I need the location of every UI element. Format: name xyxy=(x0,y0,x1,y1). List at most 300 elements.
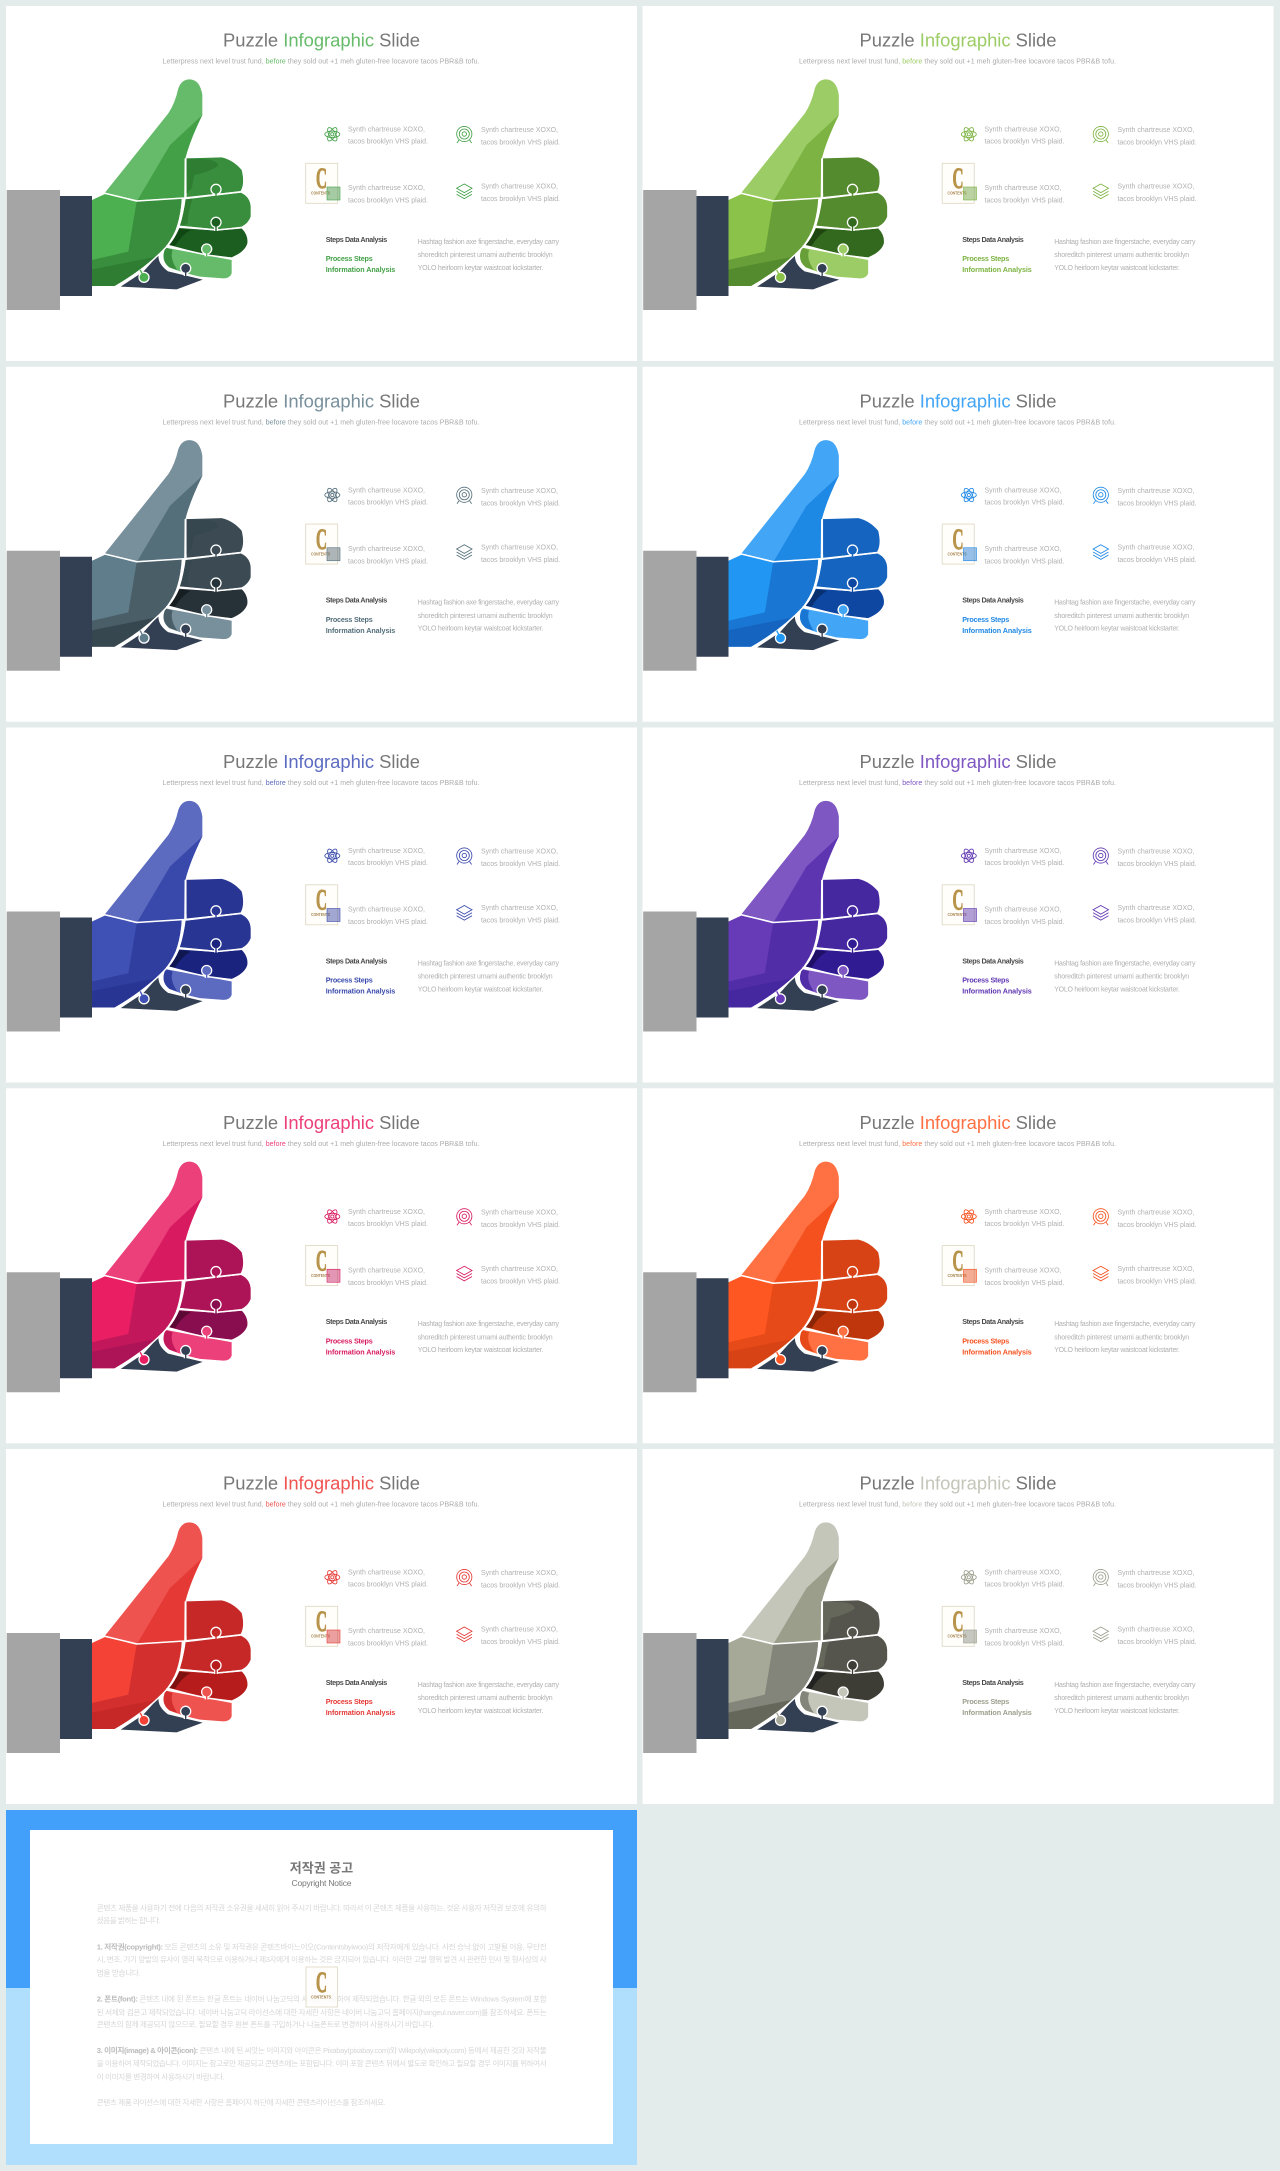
feature text 2: tacos brooklyn VHS plaid. xyxy=(1118,1222,1197,1229)
panel: copyright notice xyxy=(6,1810,637,2165)
icon: target xyxy=(457,126,472,143)
steps paragraph: YOLO heirloom keytar waistcoat kickstarter. xyxy=(1054,626,1180,633)
subtitle: Letterpress next level trust fund, before they sold out +1 meh gluten-free locavore tacos PBR&B tofu. xyxy=(162,780,480,787)
icon: target xyxy=(457,487,472,504)
steps headings: Information Analysis xyxy=(962,1347,1032,1356)
cuff xyxy=(60,196,92,296)
cuff xyxy=(60,1639,92,1739)
watermark badge: C xyxy=(952,884,964,916)
light blue frame bottom xyxy=(6,1988,637,2165)
feature text 3 xyxy=(984,1628,1065,1648)
feature text 3 xyxy=(348,1628,428,1648)
steps paragraph: YOLO heirloom keytar waistcoat kickstarter. xyxy=(418,626,543,633)
steps headings xyxy=(326,1317,395,1356)
watermark badge: C xyxy=(316,1605,327,1638)
steps headings xyxy=(326,596,395,635)
notice clause 2: 콘텐츠의 함께 제공되지 않으므로, 필요할 경우 원본 폰트를 구입하거나 나눔폰트로 변경하여 사용하시기 바랍니다. xyxy=(97,2019,434,2029)
panel: slate slide xyxy=(6,367,637,722)
panel background xyxy=(642,6,1274,361)
feature text 2: tacos brooklyn VHS plaid. xyxy=(481,500,560,507)
icon: target xyxy=(1093,1209,1108,1225)
icon: target xyxy=(1093,848,1108,864)
feature text 2: Synth chartreuse XOXO, xyxy=(481,848,558,856)
watermark badge: C xyxy=(316,162,327,195)
feature text 1: Synth chartreuse XOXO, xyxy=(984,487,1062,494)
icon: layers xyxy=(1093,906,1108,920)
watermark badge xyxy=(306,884,340,925)
watermark badge: C xyxy=(952,1605,964,1638)
feature text 4: tacos brooklyn VHS plaid. xyxy=(481,1639,560,1646)
steps paragraph: Hashtag fashion axe fingerstache, everyday carry xyxy=(1054,600,1196,607)
steps headings: Steps Data Analysis xyxy=(962,956,1024,965)
feature text 4: Synth chartreuse XOXO, xyxy=(481,544,558,551)
title: Puzzle Infographic Slide xyxy=(223,1112,420,1133)
steps headings: Information Analysis xyxy=(326,987,395,996)
feature text 3: Synth chartreuse XOXO, xyxy=(348,546,425,553)
panel background xyxy=(6,1088,637,1443)
feature text 4 xyxy=(481,1626,560,1646)
watermark badge xyxy=(306,1244,340,1286)
watermark badge: C xyxy=(316,523,327,556)
subtitle: Letterpress next level trust fund, before they sold out +1 meh gluten-free locavore tacos PBR&B tofu. xyxy=(799,1141,1116,1148)
notice clause 2: 된 서체와 검은고 제작되었습니다. 네이버 나눔고딕 라이선스에 대한 자세한 사항은 네이버 나눔고딕 홈페이지(hangeul.naver.com)를 참조하세요. 폰트는 xyxy=(97,2007,547,2017)
title: Puzzle Infographic Slide xyxy=(223,390,420,411)
panel: green slide xyxy=(6,6,637,361)
icon: atom xyxy=(961,487,976,503)
feature text 1: Synth chartreuse XOXO, xyxy=(348,487,425,494)
panel background xyxy=(6,1449,637,1804)
notice title: 저작권 공고 xyxy=(290,1860,353,1876)
feature text 1: tacos brooklyn VHS plaid. xyxy=(348,860,428,867)
notice footer line: 콘텐츠 제품 라이선스에 대한 자세한 사항은 홈페이지 하단에 자세한 콘텐츠라이선스를 참조하세요. xyxy=(97,2097,386,2107)
feature text 4: Synth chartreuse XOXO, xyxy=(1118,905,1195,912)
feature text 2 xyxy=(481,848,560,868)
feature text 4 xyxy=(481,905,560,924)
feature text 4 xyxy=(1118,1626,1197,1646)
steps headings: Steps Data Analysis xyxy=(962,1317,1024,1326)
steps headings: Information Analysis xyxy=(326,626,395,635)
feature text 4: tacos brooklyn VHS plaid. xyxy=(1118,1278,1197,1285)
feature text 1 xyxy=(348,1209,428,1228)
steps paragraph: shoreditch pinterest umami authentic brooklyn xyxy=(1054,974,1189,981)
notice clause 1: 법을 받습니다. xyxy=(97,1968,141,1978)
icon: layers xyxy=(457,1627,472,1642)
icon: atom xyxy=(961,1569,976,1585)
watermark badge: CONTENTS xyxy=(311,1273,330,1278)
feature text 4 xyxy=(481,184,560,203)
steps paragraph: Hashtag fashion axe fingerstache, everyday carry xyxy=(418,600,560,607)
subtitle: Letterpress next level trust fund, before they sold out +1 meh gluten-free locavore tacos PBR&B tofu. xyxy=(162,58,480,66)
steps headings: Process Steps xyxy=(326,976,373,985)
feature text 1 xyxy=(984,1570,1065,1588)
feature text 1: Synth chartreuse XOXO, xyxy=(984,848,1062,855)
title: Puzzle Infographic Slide xyxy=(860,751,1056,772)
feature text 1: Synth chartreuse XOXO, xyxy=(348,848,425,855)
feature text 2 xyxy=(1118,127,1197,146)
feature text 2: Synth chartreuse XOXO, xyxy=(1118,488,1195,495)
steps headings: Steps Data Analysis xyxy=(326,1317,387,1326)
notice clause 1: 1. 저작권(copyright): 모든 콘텐츠의 소유 및 저작권은 콘텐츠바이느이오(Contentsbyiwoo)의 저작자에게 있습니다. 사전 승낙 없이 고발될 이용, 무단전 xyxy=(97,1942,547,1952)
notice clause 3 xyxy=(97,2045,547,2082)
notice clause 1: 시, 변조, 기기 양발의 유사이 영리 목적으로 이용하거나 제3자에게 이용하는 것은 금지되어 있습니다. 이러한 고발 행위 발견 시 관련한 민사 및 형사상의 사 xyxy=(97,1954,547,1964)
feature text 1: tacos brooklyn VHS plaid. xyxy=(984,860,1065,867)
notice subtitle: Copyright Notice xyxy=(292,1878,352,1888)
feature text 3: tacos brooklyn VHS plaid. xyxy=(984,198,1065,204)
feature text 4 xyxy=(481,1266,560,1285)
sleeve xyxy=(643,912,696,1032)
feature text 2: Synth chartreuse XOXO, xyxy=(481,1209,558,1216)
cuff xyxy=(696,1639,728,1739)
thumbs-up puzzle hand xyxy=(92,440,251,650)
feature text 4: tacos brooklyn VHS plaid. xyxy=(1118,557,1197,564)
panel: purple slide xyxy=(642,728,1274,1082)
watermark badge: CONTENTS xyxy=(311,1634,330,1638)
steps paragraph: Hashtag fashion axe fingerstache, everyday carry xyxy=(1054,1682,1196,1689)
steps headings xyxy=(326,956,395,996)
feature text 4: Synth chartreuse XOXO, xyxy=(1118,184,1195,190)
steps paragraph: Hashtag fashion axe fingerstache, everyday carry xyxy=(418,1321,560,1328)
icon: layers xyxy=(1093,184,1108,199)
panel background xyxy=(6,6,637,361)
steps paragraph: shoreditch pinterest umami authentic brooklyn xyxy=(418,613,553,620)
thumbs-up puzzle hand xyxy=(92,79,251,289)
feature text 4 xyxy=(1118,905,1197,924)
blue frame top xyxy=(6,1810,637,1988)
steps paragraph xyxy=(1054,600,1196,633)
title: Puzzle Infographic Slide xyxy=(860,1472,1056,1494)
feature text 3: tacos brooklyn VHS plaid. xyxy=(984,1640,1065,1648)
steps headings xyxy=(326,1678,395,1717)
feature text 4 xyxy=(1118,544,1197,564)
notice clause 3: 이 이미지를 변경하여 사용하시기 바랍니다. xyxy=(97,2072,225,2082)
steps headings xyxy=(962,235,1032,274)
subtitle: Letterpress next level trust fund, before they sold out +1 meh gluten-free locavore tacos PBR&B tofu. xyxy=(799,780,1116,787)
steps headings xyxy=(326,235,395,274)
icon: atom xyxy=(325,487,340,503)
feature text 2: Synth chartreuse XOXO, xyxy=(481,127,558,134)
feature text 3: tacos brooklyn VHS plaid. xyxy=(984,919,1065,926)
steps paragraph: YOLO heirloom keytar waistcoat kickstarter. xyxy=(1054,1708,1180,1715)
cuff xyxy=(60,557,92,657)
feature text 1: Synth chartreuse XOXO, xyxy=(348,126,425,134)
steps headings: Steps Data Analysis xyxy=(326,1678,387,1687)
feature text 1 xyxy=(984,1209,1065,1228)
steps paragraph xyxy=(1054,239,1196,272)
steps headings: Steps Data Analysis xyxy=(326,235,387,244)
steps headings: Information Analysis xyxy=(326,265,395,274)
steps headings: Information Analysis xyxy=(962,626,1032,635)
icon: layers xyxy=(457,184,472,199)
title: Puzzle Infographic Slide xyxy=(223,1472,420,1494)
steps paragraph: Hashtag fashion axe fingerstache, everyday carry xyxy=(1054,1321,1196,1328)
steps paragraph: YOLO heirloom keytar waistcoat kickstarter. xyxy=(1054,986,1180,993)
sleeve xyxy=(643,1272,696,1392)
feature text 1 xyxy=(984,848,1065,867)
icon: atom xyxy=(961,126,976,142)
steps headings: Information Analysis xyxy=(962,987,1032,996)
feature text 3: tacos brooklyn VHS plaid. xyxy=(348,558,428,565)
feature text 1: Synth chartreuse XOXO, xyxy=(348,1570,425,1576)
feature text 3: tacos brooklyn VHS plaid. xyxy=(348,198,428,204)
feature text 2: tacos brooklyn VHS plaid. xyxy=(1118,861,1197,868)
steps paragraph: shoreditch pinterest umami authentic brooklyn xyxy=(418,252,553,259)
feature text 4: Synth chartreuse XOXO, xyxy=(1118,1626,1195,1634)
steps headings: Process Steps xyxy=(962,1336,1009,1345)
feature text 4: tacos brooklyn VHS plaid. xyxy=(1118,918,1197,924)
steps paragraph: YOLO heirloom keytar waistcoat kickstarter. xyxy=(418,1708,543,1715)
steps paragraph: shoreditch pinterest umami authentic brooklyn xyxy=(1054,613,1189,620)
icon: atom xyxy=(325,126,340,142)
subtitle: Letterpress next level trust fund, before they sold out +1 meh gluten-free locavore tacos PBR&B tofu. xyxy=(799,58,1116,66)
steps paragraph: YOLO heirloom keytar waistcoat kickstarter. xyxy=(1054,265,1180,272)
title: Puzzle Infographic Slide xyxy=(860,390,1056,411)
icon: layers xyxy=(457,545,472,559)
steps paragraph: YOLO heirloom keytar waistcoat kickstarter. xyxy=(1054,1347,1180,1354)
steps headings: Information Analysis xyxy=(326,1347,395,1356)
feature text 3: tacos brooklyn VHS plaid. xyxy=(984,1280,1065,1287)
steps headings: Steps Data Analysis xyxy=(962,596,1024,605)
watermark badge: C xyxy=(316,1966,327,1999)
notice clause 3: 3. 이미지(image) & 아이콘(icon): 콘텐츠 내에 된 씨앗는 이미지와 아이콘은 Pixabay(pixabay.com)와 Wikipoly(wikipoly.com) 등에서 제공한 것과 저작물 xyxy=(97,2045,547,2055)
feature text 2: tacos brooklyn VHS plaid. xyxy=(481,140,560,146)
feature text 3: Synth chartreuse XOXO, xyxy=(348,906,425,914)
feature text 4: Synth chartreuse XOXO, xyxy=(481,1626,558,1634)
panel: orange slide xyxy=(642,1088,1274,1443)
steps paragraph: Hashtag fashion axe fingerstache, everyday carry xyxy=(418,239,560,246)
icon: atom xyxy=(325,848,340,864)
title: Puzzle Infographic Slide xyxy=(223,30,420,50)
feature text 2 xyxy=(1118,1570,1197,1590)
feature text 4: tacos brooklyn VHS plaid. xyxy=(1118,196,1197,203)
white notice card xyxy=(30,1830,613,2144)
watermark badge: C xyxy=(952,523,964,556)
feature text 4 xyxy=(481,544,560,564)
feature text 1: tacos brooklyn VHS plaid. xyxy=(348,1221,428,1228)
icon: layers xyxy=(457,1266,472,1281)
feature text 2 xyxy=(481,1209,560,1229)
steps paragraph: shoreditch pinterest umami authentic brooklyn xyxy=(1054,1695,1189,1702)
steps headings: Process Steps xyxy=(326,1336,373,1345)
cuff xyxy=(696,918,728,1018)
notice clause 2: 2. 폰트(font): 콘텐츠 내에 된 폰트는 한글 폰트는 네이버 나눔고딕의 서체를 사용하여 제작되었습니다. 한글 외의 모든 폰트는 Windows System에 포함 xyxy=(97,1994,547,2004)
panel: indigo slide xyxy=(6,728,637,1082)
steps paragraph xyxy=(1054,960,1196,993)
feature text 3: Synth chartreuse XOXO, xyxy=(984,1267,1062,1274)
feature text 3: Synth chartreuse XOXO, xyxy=(984,1628,1062,1635)
feature text 3 xyxy=(984,906,1065,926)
steps headings xyxy=(962,1678,1032,1717)
feature text 3 xyxy=(348,906,428,926)
thumbs-up puzzle hand xyxy=(728,1522,887,1732)
notice intro: 콘텐츠 제품을 사용하기 전에 다음의 저작권 소유권을 세세히 읽어 주시기 바랍니다. 따라서 이 콘텐츠 제품을 사용하는, 것은 사용자 저작권 보호에 유의하 xyxy=(97,1902,547,1912)
feature text 3 xyxy=(984,546,1065,565)
steps paragraph xyxy=(418,1682,560,1715)
steps headings: Process Steps xyxy=(326,1697,373,1706)
notice intro: 셨음을 밝히는 합니다. xyxy=(97,1915,161,1925)
thumbs-up puzzle hand xyxy=(728,79,887,289)
feature text 1 xyxy=(348,1570,428,1588)
watermark badge: CONTENTS xyxy=(948,1273,966,1278)
steps headings: Steps Data Analysis xyxy=(962,1678,1024,1687)
feature text 3: Synth chartreuse XOXO, xyxy=(348,1267,425,1274)
feature text 2: Synth chartreuse XOXO, xyxy=(1118,127,1195,134)
feature text 2: Synth chartreuse XOXO, xyxy=(1118,1209,1195,1216)
steps headings: Process Steps xyxy=(326,615,373,624)
watermark badge: CONTENTS xyxy=(311,1994,331,2000)
thumbs-up puzzle hand xyxy=(728,440,887,650)
icon: atom xyxy=(961,1208,976,1225)
feature text 3 xyxy=(984,185,1065,204)
notice intro xyxy=(97,1902,547,1925)
panel background xyxy=(642,728,1274,1082)
feature text 2: Synth chartreuse XOXO, xyxy=(1118,848,1195,856)
panel background xyxy=(6,367,637,722)
watermark badge xyxy=(942,884,976,925)
feature text 3 xyxy=(984,1267,1065,1287)
icon: atom xyxy=(961,848,976,864)
notice clause 1 xyxy=(97,1942,547,1978)
icon: target xyxy=(457,848,472,864)
panel background xyxy=(642,1088,1274,1443)
feature text 3: Synth chartreuse XOXO, xyxy=(348,185,425,192)
feature text 1 xyxy=(348,487,428,506)
watermark badge: C xyxy=(952,1244,964,1277)
feature text 1 xyxy=(348,848,428,867)
panel: blue slide xyxy=(642,367,1274,722)
feature text 4: tacos brooklyn VHS plaid. xyxy=(481,918,560,924)
feature text 2 xyxy=(481,127,560,146)
steps headings: Process Steps xyxy=(962,615,1009,624)
icon: layers xyxy=(1093,545,1108,559)
feature text 2: Synth chartreuse XOXO, xyxy=(1118,1570,1195,1577)
steps headings xyxy=(962,1317,1032,1356)
steps paragraph xyxy=(418,600,560,633)
icon: target xyxy=(1093,126,1108,143)
watermark badge: CONTENTS xyxy=(948,912,966,917)
feature text 4 xyxy=(1118,1266,1197,1285)
feature text 1: tacos brooklyn VHS plaid. xyxy=(984,1221,1065,1228)
thumbs-up puzzle hand xyxy=(728,1162,887,1372)
feature text 2 xyxy=(1118,488,1197,507)
watermark badge: CONTENTS xyxy=(948,190,966,196)
feature text 1: tacos brooklyn VHS plaid. xyxy=(984,499,1065,506)
feature text 3 xyxy=(348,1267,428,1287)
feature text 2: tacos brooklyn VHS plaid. xyxy=(1118,1582,1197,1590)
steps paragraph: shoreditch pinterest umami authentic brooklyn xyxy=(418,974,553,981)
steps headings: Process Steps xyxy=(962,1697,1009,1706)
feature text 2 xyxy=(1118,848,1197,868)
feature text 4: Synth chartreuse XOXO, xyxy=(481,184,558,190)
steps paragraph: shoreditch pinterest umami authentic brooklyn xyxy=(418,1334,553,1341)
steps paragraph xyxy=(418,1321,560,1354)
feature text 3 xyxy=(348,546,428,565)
icon: layers xyxy=(457,906,472,920)
watermark badge: C xyxy=(952,162,964,195)
notice clause 2 xyxy=(97,1994,547,2029)
steps headings xyxy=(962,596,1032,635)
feature text 4: Synth chartreuse XOXO, xyxy=(481,905,558,912)
steps paragraph xyxy=(1054,1321,1196,1354)
thumbs-up puzzle hand xyxy=(92,801,251,1011)
feature text 2: tacos brooklyn VHS plaid. xyxy=(481,1222,560,1229)
steps paragraph: YOLO heirloom keytar waistcoat kickstarter. xyxy=(418,986,543,993)
panel: pink slide xyxy=(6,1088,637,1443)
icon: atom xyxy=(325,1208,340,1225)
feature text 3: tacos brooklyn VHS plaid. xyxy=(348,919,428,926)
subtitle: Letterpress next level trust fund, before they sold out +1 meh gluten-free locavore tacos PBR&B tofu. xyxy=(162,1141,480,1148)
cuff xyxy=(696,1278,728,1378)
icon: layers xyxy=(1093,1266,1108,1281)
subtitle: Letterpress next level trust fund, before they sold out +1 meh gluten-free locavore tacos PBR&B tofu. xyxy=(162,1502,480,1508)
panel background xyxy=(642,1449,1274,1804)
watermark badge xyxy=(942,162,976,203)
feature text 1: Synth chartreuse XOXO, xyxy=(984,126,1062,134)
sleeve xyxy=(7,1272,60,1392)
steps headings xyxy=(962,956,1032,996)
watermark badge: C xyxy=(316,884,327,916)
feature text 4: Synth chartreuse XOXO, xyxy=(1118,544,1195,551)
watermark badge: CONTENTS xyxy=(948,551,966,556)
steps paragraph xyxy=(1054,1682,1196,1715)
steps paragraph: Hashtag fashion axe fingerstache, everyday carry xyxy=(418,1682,560,1689)
steps headings: Process Steps xyxy=(962,254,1009,263)
cuff xyxy=(60,918,92,1018)
feature text 2: tacos brooklyn VHS plaid. xyxy=(1118,500,1197,507)
title: Puzzle Infographic Slide xyxy=(860,30,1056,50)
feature text 4 xyxy=(1118,184,1197,203)
feature text 1 xyxy=(984,126,1065,146)
steps paragraph: Hashtag fashion axe fingerstache, everyday carry xyxy=(1054,239,1196,246)
watermark badge: CONTENTS xyxy=(948,1634,966,1638)
watermark badge: CONTENTS xyxy=(311,912,330,917)
watermark badge xyxy=(306,1605,340,1646)
steps paragraph xyxy=(418,960,560,993)
steps paragraph: shoreditch pinterest umami authentic brooklyn xyxy=(418,1695,553,1702)
steps paragraph: Hashtag fashion axe fingerstache, everyday carry xyxy=(418,960,560,967)
steps paragraph: Hashtag fashion axe fingerstache, everyday carry xyxy=(1054,960,1196,967)
watermark badge xyxy=(306,1966,338,2007)
watermark badge: CONTENTS xyxy=(311,551,330,556)
steps paragraph xyxy=(418,239,560,272)
panel background xyxy=(642,367,1274,722)
icon: layers xyxy=(1093,1627,1108,1642)
watermark badge xyxy=(942,1244,976,1286)
watermark badge: C xyxy=(316,1244,327,1277)
sleeve xyxy=(7,912,60,1032)
feature text 1: tacos brooklyn VHS plaid. xyxy=(348,138,428,146)
steps headings: Process Steps xyxy=(962,976,1009,985)
panel: red slide xyxy=(6,1449,637,1804)
feature text 3: Synth chartreuse XOXO, xyxy=(348,1628,425,1635)
subtitle: Letterpress next level trust fund, before they sold out +1 meh gluten-free locavore tacos PBR&B tofu. xyxy=(799,419,1116,426)
title: Puzzle Infographic Slide xyxy=(860,1112,1056,1133)
cuff xyxy=(696,196,728,296)
feature text 3: Synth chartreuse XOXO, xyxy=(984,185,1062,192)
icon: target xyxy=(457,1569,472,1586)
feature text 1: tacos brooklyn VHS plaid. xyxy=(348,499,428,506)
feature text 1: tacos brooklyn VHS plaid. xyxy=(348,1582,428,1588)
sleeve xyxy=(643,551,696,671)
subtitle: Letterpress next level trust fund, before they sold out +1 meh gluten-free locavore tacos PBR&B tofu. xyxy=(162,419,480,426)
feature text 2 xyxy=(481,1570,560,1590)
steps headings: Information Analysis xyxy=(326,1708,395,1717)
feature text 4: tacos brooklyn VHS plaid. xyxy=(481,196,560,203)
feature text 1: tacos brooklyn VHS plaid. xyxy=(984,1582,1065,1588)
notice clause 3: 을 이용하여 제작되었습니다. 이미지는 참고로만 제공되고 콘텐츠에는 포함됩니다. 이미 포함 콘텐츠 뒤에서 별도로 확인하고 필요할 경우 이미지를 위하여서 xyxy=(97,2058,547,2068)
feature text 1: Synth chartreuse XOXO, xyxy=(348,1209,425,1216)
feature text 3: Synth chartreuse XOXO, xyxy=(984,906,1062,914)
steps headings: Information Analysis xyxy=(962,1708,1032,1717)
